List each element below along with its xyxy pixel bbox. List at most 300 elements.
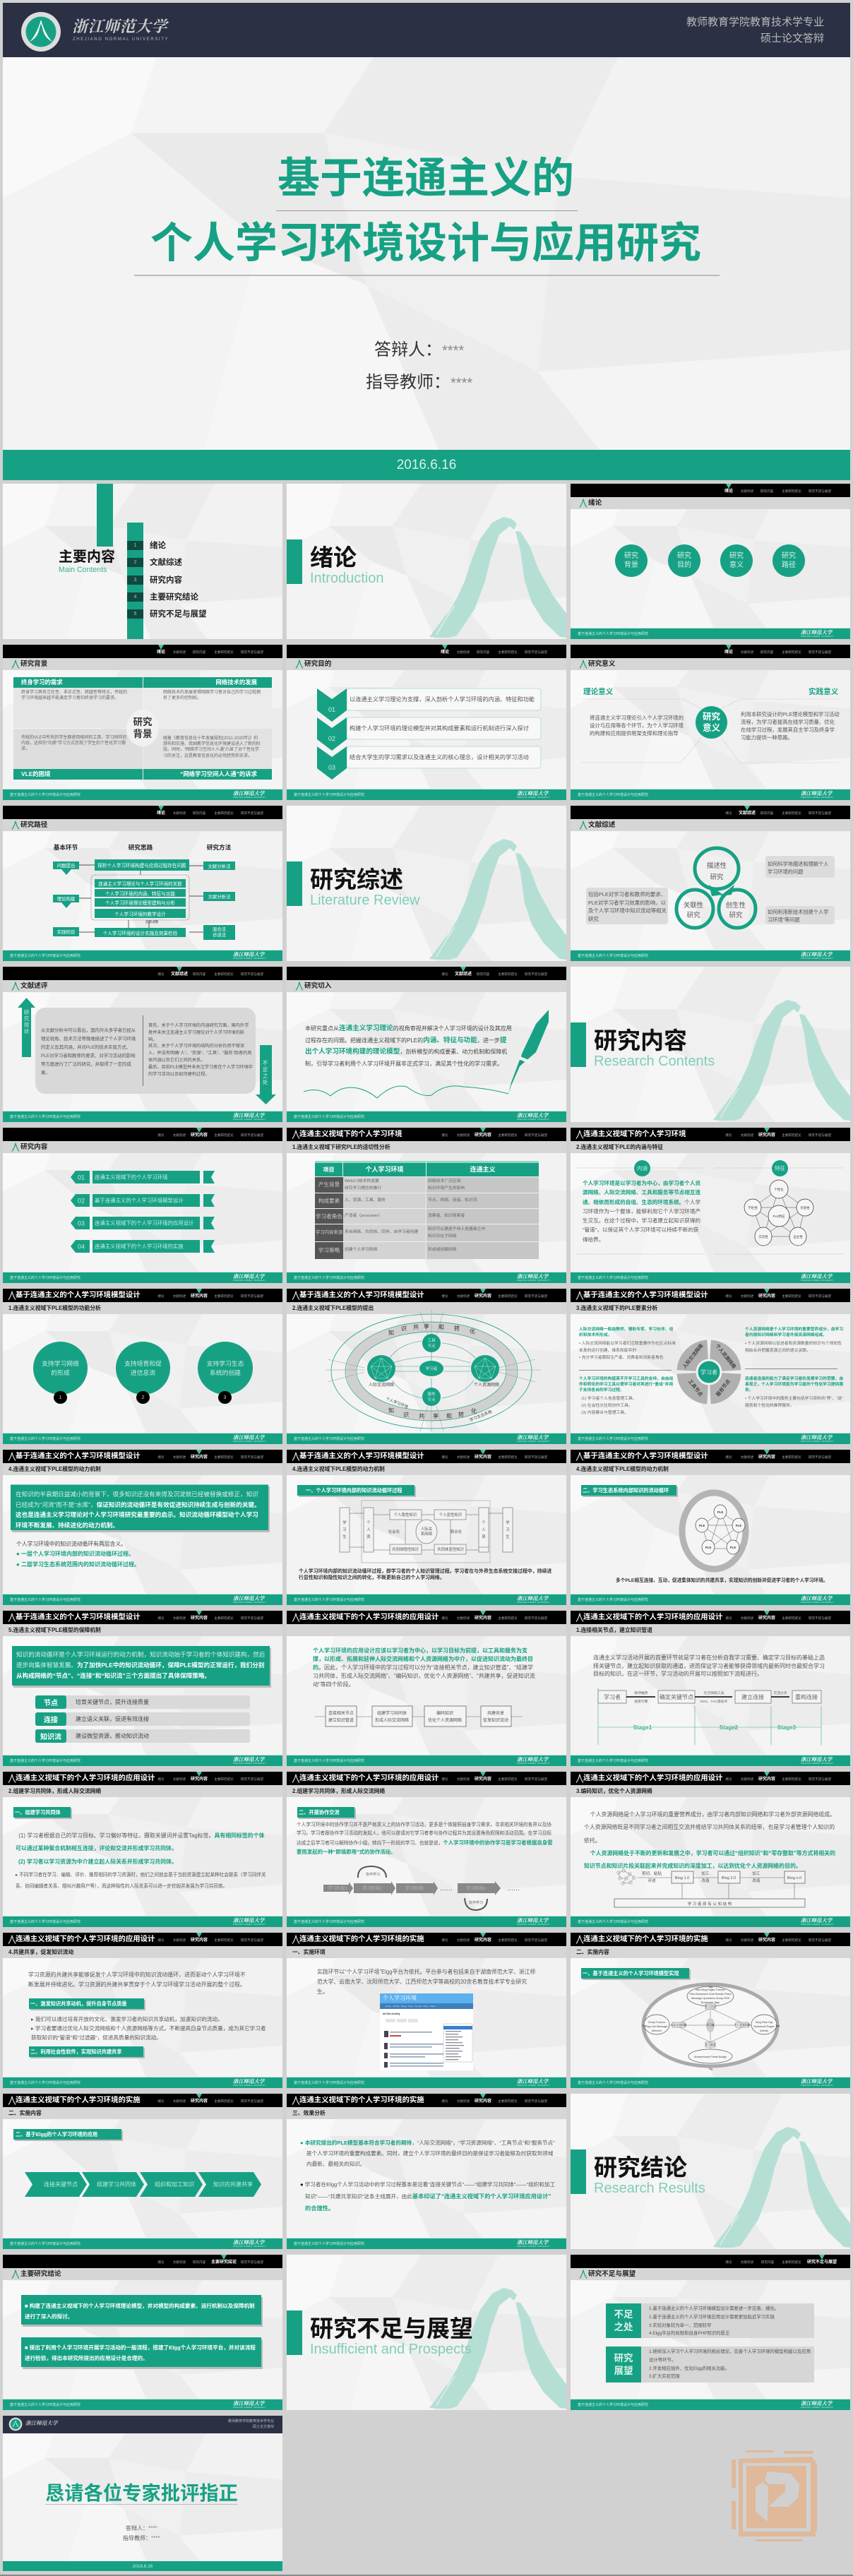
slide: comparison table: 浙江师范大学 bbox=[517, 1273, 548, 1280]
ecosystem ring diagram: PLE bbox=[705, 1546, 711, 1549]
slide: PLE model functions: 文献综述 bbox=[173, 1294, 186, 1298]
collaboration flow: 协作学习 bbox=[366, 1872, 380, 1877]
collaboration flow: 学习阶段2 bbox=[362, 1885, 382, 1891]
contents item 5 bbox=[127, 609, 143, 619]
slide: literature review overview: 基于连通主义的个人学习环境设计与应用研究 bbox=[578, 954, 648, 958]
text: social network: • 人际交流网络能以学习者们互联重要作为社区点标准本身的运行创建、维系和废弃的 bbox=[579, 1342, 676, 1353]
table: 学习者角色 bbox=[316, 1213, 342, 1220]
slide: effect analysis bbox=[287, 2094, 566, 2249]
four stage flow: 建立知识管道 bbox=[328, 1717, 354, 1723]
outlook panel: 展望 bbox=[614, 2366, 633, 2375]
slide: research background: 基于连通主义的个人学习环境设计与应用研究 bbox=[10, 793, 80, 797]
encode paragraph: 个人资源网络是个人学习环境的重要营养成分，由学习者内部知识网络和学习者外部资源网络组成。个人资源网络既是不同学习者之间相互交流并维结学习共同体关系的纽带，也是学习者管理个人知识的依托。 bbox=[584, 1811, 835, 1844]
stage flow: 教师推荐 bbox=[634, 1690, 648, 1695]
table: 连通主义 bbox=[470, 1166, 496, 1173]
row: link bbox=[35, 1712, 250, 1726]
slide: implementation content A: 文献综述 bbox=[741, 1938, 753, 1942]
slide: research significance: 基于连通主义的个人学习环境设计与应用研究 bbox=[578, 793, 648, 797]
slide: implementation content A bbox=[571, 1933, 850, 2088]
three ring diagram: 描述性 bbox=[707, 861, 727, 869]
slide: PLE meaning and features: 主要研究结论 bbox=[782, 1133, 801, 1137]
slide: research background: 绪论 bbox=[157, 650, 165, 654]
platform ring diagram: Bookmark Pages bbox=[754, 2025, 775, 2028]
slide: research contents list: 主要研究结论 bbox=[214, 1133, 234, 1137]
slide: connect nodes bbox=[571, 1611, 850, 1766]
slide: co-build and share: 浙江师范大学 bbox=[233, 2078, 264, 2085]
table: 项目 bbox=[323, 1167, 335, 1173]
table: 构成要素 bbox=[318, 1198, 340, 1204]
platform ring diagram: Member bbox=[652, 2029, 662, 2032]
encode paragraph bbox=[584, 1811, 835, 1869]
slide: research path: 研究路径 bbox=[20, 821, 47, 829]
slide: literature commentary: 绪论 bbox=[157, 972, 165, 976]
slide: dynamic mechanism C: 基于连通主义的个人学习环境设计与应用研究 bbox=[578, 1598, 648, 1602]
blog flow: Blog 2.0 bbox=[722, 1876, 736, 1880]
slide: limitations and outlook: 研究不足与展望 bbox=[807, 2260, 837, 2264]
environment paragraph: 实践环节以“个人学习环境”Elgg平台为依托。平台参与者包括来自于湖南师范大学、浙江师范大学、云南大学、沈阳师范大学、江西师范大学等高校的20余名教育技术学专业研究生。 bbox=[317, 1969, 535, 1995]
slide: PLE model functions: 浙江师范大学 bbox=[233, 1434, 264, 1441]
slide: literature review overview: 浙江师范大学 bbox=[801, 951, 832, 958]
limitations panel: 之处 bbox=[614, 2322, 633, 2332]
contents item 1 bbox=[127, 541, 143, 550]
slide: dynamic mechanism A: 浙江师范大学 bbox=[233, 1595, 264, 1602]
table: 产消者（prosumer） bbox=[345, 1214, 382, 1218]
title line two: 个人学习环境设计与应用研究 bbox=[150, 220, 701, 267]
tag: ecosystem cycle: 二、学习生态系统内部知识的流动循环 bbox=[583, 1487, 669, 1493]
arrow label: achieved: 研究现状 bbox=[24, 1009, 29, 1034]
slide: research entry: 基于连通主义的个人学习环境设计与应用研究 bbox=[294, 1115, 364, 1119]
slide: limitations and outlook: 研究内容 bbox=[761, 2260, 774, 2264]
finding 1: ● 本研究提出的PLE模型基本符合学习者的期待，“人际交流网络”、“学习资源网络”、“工具节点”和“服务节点”是个人学习环境的重要构成要素。同时，建立个人学习环境的最终目的是保证学习者能够及时获取到领域内最新、最相关的知识。 bbox=[300, 2140, 555, 2167]
slide: section research results bbox=[571, 2094, 850, 2249]
slide: connect nodes: 研究内容 bbox=[758, 1616, 775, 1620]
text: social network: • 充分学习者跟踪生产者、消费者和创新者角色 bbox=[579, 1356, 664, 1360]
university english name: ZHEJIANG NORMAL UNIVERSITY bbox=[73, 37, 169, 42]
share bullets: ▸ 学习者要通过优化人际交流网络和个人资源网络等方式，不断提高自身节点质量，成为其它学习者获取知识的“管道”和“过滤器”，促进高质量的知识流动。 bbox=[31, 2025, 266, 2041]
slide: encode knowledge: 连通主义视域下的个人学习环境的应用设计 bbox=[583, 1775, 722, 1782]
network diagram: 学社性 bbox=[748, 1205, 758, 1210]
note: create: 如何利用新技术创建个人学习环境”等问题 bbox=[768, 909, 828, 922]
slide: contents: 文献综述 bbox=[150, 559, 182, 567]
slide: dynamic mechanism C: 基于连通主义的个人学习环境模型设计 bbox=[583, 1453, 708, 1460]
practical heading: 实践意义 bbox=[809, 688, 838, 696]
four stage flow: 编码知识 bbox=[436, 1710, 453, 1716]
slide: research contents list: ZHEJIANG NORMAL UNIVERSITY bbox=[233, 1280, 266, 1282]
table: 知识存在于网络 bbox=[428, 1234, 457, 1239]
tag: model implementation bbox=[581, 1968, 689, 1979]
model diagram: 服务 bbox=[427, 1391, 436, 1397]
slide: community A: 浙江师范大学 bbox=[233, 1917, 264, 1924]
box: model: 个人学习环境理论模型建构与分析 bbox=[105, 901, 175, 906]
slide: effect analysis: 基于连通主义的个人学习环境设计与应用研究 bbox=[294, 2242, 364, 2246]
circle: background bbox=[615, 544, 648, 577]
slide: research background: 研究内容 bbox=[193, 650, 205, 654]
slide: section introduction bbox=[287, 484, 566, 639]
slide: PLE model: 绪论 bbox=[441, 1294, 448, 1298]
slide: safeguard mechanism: 5.连通主义视域下PLE模型的保障机制 bbox=[8, 1627, 101, 1633]
limitations panel: 2.基于连通主义的个人学习环境应用设计需要更加贴近学习实践 bbox=[649, 2315, 775, 2320]
stage flow: 建立连接 bbox=[741, 1693, 764, 1700]
text: tools: (2) 社会性交往和协作工具。 bbox=[581, 1404, 633, 1408]
theoretical text: 将连通主义学习理论引入个人学习环境的设计与应用等各个环节，为个人学习环境的构建和应用提供框架支撑和理论指导 bbox=[590, 715, 684, 737]
department bbox=[228, 2419, 274, 2429]
slide: PLE elements: 浙江师范大学 bbox=[801, 1434, 832, 1441]
stage flow: 搜索引擎 bbox=[634, 1699, 648, 1704]
slide: PLE elements: 研究内容 bbox=[758, 1294, 775, 1298]
column header: method: 研究方法 bbox=[207, 844, 231, 851]
blog flow: 学 习 者 原 有 认 知 结 构 bbox=[688, 1901, 732, 1907]
slide: limitations and outlook: 文献综述 bbox=[741, 2260, 753, 2264]
purpose 3: 结合大学生的学习需求以及连通主义的核心理念，设计相关的学习活动 bbox=[350, 754, 529, 761]
slide: main conclusions bbox=[3, 2255, 282, 2410]
slide: implementation content B: 主要研究结论 bbox=[214, 2099, 234, 2103]
slide: research background: 研究不足与展望 bbox=[241, 650, 263, 654]
slide: literature commentary: 研究内容 bbox=[193, 972, 205, 976]
slide: research significance: 主要研究结论 bbox=[782, 650, 801, 654]
box: implement: 个人学习环境的设计实施及效果检验 bbox=[103, 931, 177, 936]
practical text: 利用本研究设计的PLE理论模型和学习活动流程，为学习者提高在线学习质量、优化在线学习过程，发展其自主学习及终身学习能力提供一种思路。 bbox=[741, 711, 840, 741]
purpose list diagram: 01 bbox=[328, 706, 335, 713]
slide: main conclusions: 浙江师范大学 bbox=[233, 2400, 264, 2407]
model diagram bbox=[326, 1310, 541, 1431]
table: 来自网络、共同体、同伴、自学习者创建 bbox=[345, 1230, 418, 1234]
three ring diagram: 研究 bbox=[729, 911, 742, 919]
slide: PLE model functions: 基于连通主义的个人学习环境设计与应用研究 bbox=[10, 1437, 80, 1441]
slide: implementation environment: 主要研究结论 bbox=[498, 1938, 518, 1942]
note: related: 包括PLE对学习者和教师的要求、PLE对学习者学习效果的影响，以及个人学习环境中知识流动等相关研究 bbox=[588, 891, 667, 922]
slide: co-build and share: 连通主义视域下的个人学习环境的应用设计 bbox=[16, 1936, 155, 1943]
slide: introduction overview: 研究内容 bbox=[760, 489, 773, 493]
slide: research significance: 绪论 bbox=[724, 650, 733, 654]
slide: research background: 文献综述 bbox=[173, 650, 186, 654]
function 2: 进信息流 bbox=[131, 1368, 155, 1376]
limitations panel: 1.基于连通主义的个人学习环境模型设计需要进一步完善、细化。 bbox=[649, 2306, 779, 2311]
section english title: Introduction bbox=[310, 571, 384, 586]
slide: dynamic mechanism C: 研究不足与展望 bbox=[809, 1455, 831, 1459]
internal cycle diagram: 共同体隐性知识 bbox=[392, 1546, 419, 1552]
slide: PLE elements: 3.连通主义视域下的PLE要素分析 bbox=[576, 1305, 657, 1311]
slide: implementation content B: 二、实施内容 bbox=[8, 2110, 42, 2116]
date bar bbox=[3, 2561, 282, 2571]
ribbons list: 连通主义视域下的个人学习环境 bbox=[95, 1174, 168, 1181]
internal cycle diagram bbox=[339, 1500, 513, 1563]
footer band: access: “网络学习空间人人通”的诉求 bbox=[180, 770, 257, 777]
slide: contents: 研究内容 bbox=[150, 576, 182, 585]
model diagram: 工具 bbox=[427, 1338, 436, 1343]
slide: research purpose: ZHEJIANG NORMAL UNIVERSITY bbox=[517, 797, 550, 799]
slide: effect analysis: 绪论 bbox=[441, 2099, 448, 2103]
stage flow: 交流分享 bbox=[773, 1690, 787, 1695]
advisor: 指导教师：**** bbox=[366, 373, 472, 392]
row: node: 节点 bbox=[44, 1700, 58, 1707]
date bar bbox=[3, 450, 850, 480]
element wheel: 人际交流网络 bbox=[681, 1342, 705, 1370]
ribbons list: 连通主义视域下的个人学习环境的实施 bbox=[95, 1243, 184, 1250]
tag: model implementation: 一、基于连通主义的个人学习环境模型实现 bbox=[583, 1970, 679, 1976]
slide: research path: 文献综述 bbox=[173, 811, 186, 815]
slide: research entry bbox=[287, 967, 566, 1122]
internal cycle diagram: 社会化 bbox=[388, 1529, 400, 1534]
community text 1: (1) 学习者根据自己的学习目标、学习偏好等特征，摄取关键词并设置Tag标签。具有相同标签的个体可以通过某种聚合机制相互连接，评论和交流并形成学习共同体。 bbox=[16, 1832, 264, 1852]
internal cycle diagram: 联合化 bbox=[451, 1529, 463, 1534]
blog flow: 加工 bbox=[752, 1871, 760, 1876]
three ring diagram: 研究 bbox=[710, 873, 723, 881]
table: 学习内容来源 bbox=[316, 1230, 342, 1235]
internal cycle diagram: 学 bbox=[506, 1520, 510, 1525]
slide: dynamic mechanism A: 基于连通主义的个人学习环境模型设计 bbox=[16, 1453, 141, 1460]
slide: safeguard mechanism: ZHEJIANG NORMAL UNIVERSITY bbox=[233, 1763, 266, 1765]
text: services bbox=[745, 1376, 843, 1408]
slide: PLE model functions: 研究不足与展望 bbox=[241, 1294, 263, 1298]
slide: dynamic mechanism A: 研究内容 bbox=[191, 1455, 208, 1459]
purpose list diagram bbox=[317, 688, 541, 780]
four stage flow: 组建学习共同体 bbox=[377, 1710, 407, 1716]
commentary right: 首先，关于个人学习环境的内涵研究方面，国内外学者并未关注连通主义学习理论对个人学习环境的影响。 bbox=[148, 1023, 249, 1042]
slide: co-build and share: 研究内容 bbox=[191, 1938, 208, 1942]
slide: research entry: ZHEJIANG NORMAL UNIVERSITY bbox=[517, 1119, 550, 1121]
slide: research purpose: 研究内容 bbox=[477, 650, 489, 654]
section title: 绪论 bbox=[310, 544, 357, 571]
tag: internal cycle: 一、个人学习环境内部的知识流动循环过程 bbox=[306, 1487, 402, 1493]
table: 消费者、知识探索者 bbox=[428, 1214, 465, 1218]
slide: implementation environment: 研究内容 bbox=[475, 1938, 491, 1942]
slide: research path: ZHEJIANG NORMAL UNIVERSITY bbox=[233, 958, 266, 960]
slide: main conclusions: 研究不足与展望 bbox=[241, 2260, 263, 2264]
four stage flow: 促发知识流动 bbox=[483, 1717, 508, 1723]
slide: application design overview bbox=[287, 1611, 566, 1766]
commentary left: 从文献分析中可以看出，国内外众多学者已经从理论视角、技术方法等微维描述了个人学习环境的定义及其内涵，并对PLE的技术实现方式、PLE对学习者和教师的要求、对学习活动的影响等方面进行了广泛的研究，并取得了一定的成果。 bbox=[41, 1028, 136, 1075]
slide: PLE model: 基于连通主义的个人学习环境设计与应用研究 bbox=[294, 1437, 364, 1441]
slide: connect nodes: 绪论 bbox=[725, 1616, 732, 1620]
slide: research background: 研究背景 bbox=[20, 660, 47, 668]
network diagram: 交流性 bbox=[758, 1234, 768, 1239]
icon: university seal bbox=[21, 12, 61, 52]
platform ring diagram: 学习活动 bbox=[705, 2005, 716, 2008]
circle: purpose bbox=[668, 544, 700, 577]
outlook panel: 2.开发相应插件、优化Elgg的相关功能。 bbox=[649, 2366, 729, 2371]
slide: PLE elements: 基于连通主义的个人学习环境模型设计 bbox=[583, 1292, 708, 1299]
text: social network bbox=[579, 1326, 676, 1360]
slide: PLE elements: ZHEJIANG NORMAL UNIVERSITY bbox=[801, 1441, 834, 1443]
slide: safeguard mechanism: 主要研究结论 bbox=[214, 1616, 234, 1620]
slide: research path: 研究内容 bbox=[193, 811, 205, 815]
slide: research significance: 研究意义 bbox=[588, 660, 615, 668]
tag: motivation bbox=[29, 1998, 144, 2009]
slide: implementation content B: 浙江师范大学 bbox=[233, 2239, 264, 2246]
box: meaning bbox=[95, 889, 186, 897]
note: describe bbox=[765, 856, 835, 878]
collaboration flow bbox=[323, 1866, 520, 1911]
caption: 多个PLE相互连接、互动，促进集体知识的共建共享，实现知识的创新并促进学习者的个人学习环境。 bbox=[616, 1578, 828, 1583]
slide: co-build and share: 绪论 bbox=[157, 1938, 165, 1942]
internal cycle diagram: 资 bbox=[366, 1534, 371, 1539]
arrow: achieved bbox=[18, 998, 276, 1104]
model diagram: 学习生态系统 bbox=[469, 1409, 493, 1423]
slide: community A: 基于连通主义的个人学习环境设计与应用研究 bbox=[10, 1920, 80, 1924]
limitations panel: 不足 bbox=[614, 2309, 633, 2319]
element wheel: 学习者 bbox=[700, 1368, 717, 1376]
slide: PLE model: 文献综述 bbox=[457, 1294, 470, 1298]
slide: literature commentary: 文献综述 bbox=[171, 972, 188, 976]
page bottom line bbox=[0, 2575, 853, 2576]
ribbons list: 02 bbox=[78, 1198, 85, 1205]
element wheel: 个人资源网络 bbox=[714, 1342, 737, 1370]
outlook panel: 1.继续深入学习个人学习环境的相关理论，完善个人学习环境的模型构建以及应用设计等环节。 bbox=[649, 2349, 811, 2363]
stage flow: 学习者 bbox=[604, 1693, 621, 1700]
circle: path: 路径 bbox=[782, 561, 796, 569]
slide: dynamic mechanism C: 文献综述 bbox=[741, 1455, 753, 1459]
closing title: 恳请各位专家批评指正 bbox=[45, 2482, 238, 2504]
slide: dynamic mechanism B: 4.连通主义视域下PLE模型的动力机制 bbox=[292, 1466, 385, 1472]
slide: PLE model: 基于连通主义的个人学习环境模型设计 bbox=[299, 1292, 424, 1299]
limitations panel bbox=[606, 2303, 814, 2338]
section title: 研究结论 bbox=[594, 2154, 687, 2181]
blog flow: 剪切、粘贴 bbox=[642, 1871, 662, 1876]
blog flow: 评述 bbox=[648, 1878, 656, 1883]
background grey panels bbox=[13, 688, 143, 728]
outlook panel: 研究 bbox=[614, 2353, 633, 2363]
slide: PLE meaning and features: 基于连通主义的个人学习环境设计与应用研究 bbox=[578, 1276, 648, 1280]
slide: implementation content B: 研究内容 bbox=[191, 2099, 208, 2103]
slide: community A: ZHEJIANG NORMAL UNIVERSITY bbox=[233, 1924, 266, 1926]
slide: PLE model functions: 主要研究结论 bbox=[214, 1294, 234, 1298]
slide: research purpose: 研究目的 bbox=[304, 660, 331, 668]
slide: PLE meaning and features: ZHEJIANG NORMAL UNIVERSITY bbox=[801, 1280, 834, 1282]
contents heading: 主要内容 bbox=[59, 549, 115, 565]
box: mixed method: 访谈法 bbox=[213, 932, 226, 938]
contents item 5: 5 bbox=[134, 612, 136, 616]
footer band: access bbox=[143, 769, 272, 780]
slide: comparison table: ZHEJIANG NORMAL UNIVERSITY bbox=[517, 1280, 550, 1282]
function 3: 系统的创建 bbox=[210, 1368, 241, 1376]
slide: literature review overview: 绪论 bbox=[725, 811, 732, 815]
grey review panel bbox=[35, 1008, 256, 1094]
meaning lead: 个人学习环境中的知识流动循环有两层含义。 bbox=[16, 1541, 126, 1547]
slide: implementation content A: 连通主义视域下的个人学习环境的实施 bbox=[583, 1936, 708, 1943]
slide: community B: 基于连通主义的个人学习环境设计与应用研究 bbox=[294, 1920, 364, 1924]
date bar: 2016.6.16 bbox=[397, 458, 456, 472]
table: 人、资源、工具、服务 bbox=[345, 1198, 386, 1203]
slide: connect nodes: ZHEJIANG NORMAL UNIVERSITY bbox=[801, 1763, 834, 1765]
text: tools: (3) 内容聚合与管理工具。 bbox=[581, 1411, 628, 1415]
slide: implementation content B: 连通主义视域下的个人学习环境的实施 bbox=[16, 2097, 141, 2104]
slide: PLE model: ZHEJIANG NORMAL UNIVERSITY bbox=[517, 1441, 550, 1443]
slide: safeguard mechanism: 绪论 bbox=[157, 1616, 165, 1620]
conclusion 1 bbox=[21, 2295, 261, 2325]
platform ring diagram: 学习服务 bbox=[705, 2043, 716, 2046]
internal cycle diagram: 个人隐性知识 bbox=[394, 1512, 417, 1517]
slide: section literature review bbox=[287, 806, 566, 961]
model diagram: 知识共享和转化 bbox=[388, 1407, 477, 1419]
center ellipse: 研究 bbox=[703, 712, 720, 722]
network diagram bbox=[577, 1168, 843, 1254]
center ellipse: 意义 bbox=[703, 723, 720, 733]
slide: community A: 文献综述 bbox=[173, 1777, 186, 1781]
slide: research contents list: 绪论 bbox=[157, 1133, 165, 1137]
screenshot: All Site Activity bbox=[383, 2012, 400, 2015]
four stage flow: 共建共享 bbox=[487, 1710, 504, 1716]
slide: implementation environment: 绪论 bbox=[441, 1938, 448, 1942]
row: knowledge flow: 知识流 bbox=[40, 1734, 61, 1741]
slide: co-build and share: 4.共建共享，促发知识流动 bbox=[8, 1949, 73, 1955]
slide: literature commentary: 浙江师范大学 bbox=[233, 1112, 264, 1119]
caption: 个人学习环境内部的知识流动循环过程，即学习者的个人知识管理过程。学习者在与外界生态系统交接过程中，持续进行显性知识和隐性知识之间的转化，不断更新自己的个人学习网络。 bbox=[299, 1569, 551, 1580]
internal cycle diagram: 资 bbox=[482, 1534, 486, 1539]
ecosystem ring diagram: PLE bbox=[699, 1524, 705, 1527]
collaboration flow: 学习阶段1 bbox=[328, 1885, 347, 1891]
slide: literature review overview bbox=[571, 806, 850, 961]
slide: research purpose: 研究不足与展望 bbox=[525, 650, 547, 654]
limitations panel: 3.实验对象较为单一、范围较窄 bbox=[649, 2323, 711, 2328]
icon: seal bbox=[8, 2418, 23, 2431]
slide: application design overview: ZHEJIANG NORMAL UNIVERSITY bbox=[517, 1763, 550, 1765]
table: 学习策略 bbox=[318, 1247, 340, 1253]
slide: research significance: 研究不足与展望 bbox=[809, 650, 831, 654]
center ellipse bbox=[696, 706, 727, 739]
slide: literature review overview: 文献综述 bbox=[588, 821, 615, 829]
internal cycle diagram: 个 bbox=[482, 1520, 486, 1525]
header: lifelong learning bbox=[13, 677, 143, 688]
table: 产生背景 bbox=[318, 1181, 340, 1188]
slide: community B: 研究不足与展望 bbox=[525, 1777, 547, 1781]
slide: introduction overview: 浙江师范大学 bbox=[801, 629, 832, 636]
center label bbox=[126, 710, 159, 746]
slide: research contents list: 研究内容 bbox=[191, 1133, 208, 1137]
slide: dynamic mechanism C bbox=[571, 1450, 850, 1605]
slide: PLE meaning and features: 浙江师范大学 bbox=[801, 1273, 832, 1280]
function 1: 支持学习网络 bbox=[42, 1360, 79, 1367]
slide: dynamic mechanism A: 绪论 bbox=[157, 1455, 165, 1459]
slide: encode knowledge: ZHEJIANG NORMAL UNIVERSITY bbox=[801, 1924, 834, 1926]
internal cycle diagram: 人 bbox=[366, 1527, 371, 1532]
slide: literature commentary: 研究不足与展望 bbox=[241, 972, 263, 976]
stage flow: 确定关键节点 bbox=[660, 1693, 693, 1700]
stage flow bbox=[597, 1688, 822, 1745]
encode paragraph: 个人资源网络处于不断的更新和发展之中，学习者可以通过“组织知识”和“零存整取”等方式将相关的知识节点和知识片段关联起来并完成知识的深度加工，以达到优化个人资源网络的目的。 bbox=[584, 1850, 835, 1869]
slide: implementation content A: ZHEJIANG NORMAL UNIVERSITY bbox=[801, 2085, 834, 2087]
slide: encode knowledge: 文献综述 bbox=[741, 1777, 753, 1781]
green callout: 在知识的半衰期日益减小的背景下，很多知识还没有来得及沉淀就已经被替换或修正，知识已经成为“河流”而不是“水库”，保证知识的流动循环是有效促进知识持续生成与创新的关键。这也是连通主义学习理论对个人学习环境研究最重要的启示。知识流动循环模型动个人学习环境不断发展、持续进化的动力机制。 bbox=[16, 1491, 261, 1529]
four stage flow bbox=[315, 1706, 523, 1727]
slide: PLE model functions: 基于连通主义的个人学习环境模型设计 bbox=[16, 1292, 141, 1299]
element wheel: 服务节点 bbox=[715, 1378, 732, 1397]
slide: implementation content A: 主要研究结论 bbox=[782, 1938, 801, 1942]
slide: implementation content A: 二、实施内容 bbox=[576, 1949, 609, 1955]
slide: safeguard mechanism: 研究内容 bbox=[191, 1616, 208, 1620]
ribbons list: 03 bbox=[78, 1220, 85, 1227]
slide: literature commentary: 文献述评 bbox=[20, 982, 47, 990]
box: explore: 探析个人学习环境构建与应用过程存在问题 bbox=[97, 864, 186, 869]
share bullets: ▸ 我们可以通过培育开放的文化、激发学习者的知识共享动机，加速知识的流动。 bbox=[31, 2016, 223, 2022]
three ring diagram: 创生性 bbox=[726, 901, 746, 909]
slide: implementation content A: 浙江师范大学 bbox=[801, 2078, 832, 2085]
slide: research entry: 研究切入 bbox=[304, 982, 331, 990]
flowchart connectors bbox=[61, 864, 203, 932]
circle: significance: 意义 bbox=[729, 561, 744, 569]
footer band: VLE bbox=[13, 769, 143, 780]
function 2: 支持培育和促 bbox=[124, 1360, 162, 1367]
slide: limitations and outlook: 绪论 bbox=[725, 2260, 732, 2264]
slide: PLE elements: 文献综述 bbox=[741, 1294, 753, 1298]
model diagram: 人际交流网络 bbox=[369, 1382, 394, 1388]
slide: implementation content A: 绪论 bbox=[725, 1938, 732, 1942]
slide: research path: 主要研究结论 bbox=[214, 811, 234, 815]
function 3 bbox=[198, 1342, 253, 1395]
bullet 2: ● 二层学习生态系统范围内的知识流动循环过程。 bbox=[16, 1561, 140, 1568]
number 2: 2 bbox=[142, 1395, 144, 1400]
platform ring diagram bbox=[641, 1983, 780, 2070]
slide: dynamic mechanism A: 文献综述 bbox=[173, 1455, 186, 1459]
